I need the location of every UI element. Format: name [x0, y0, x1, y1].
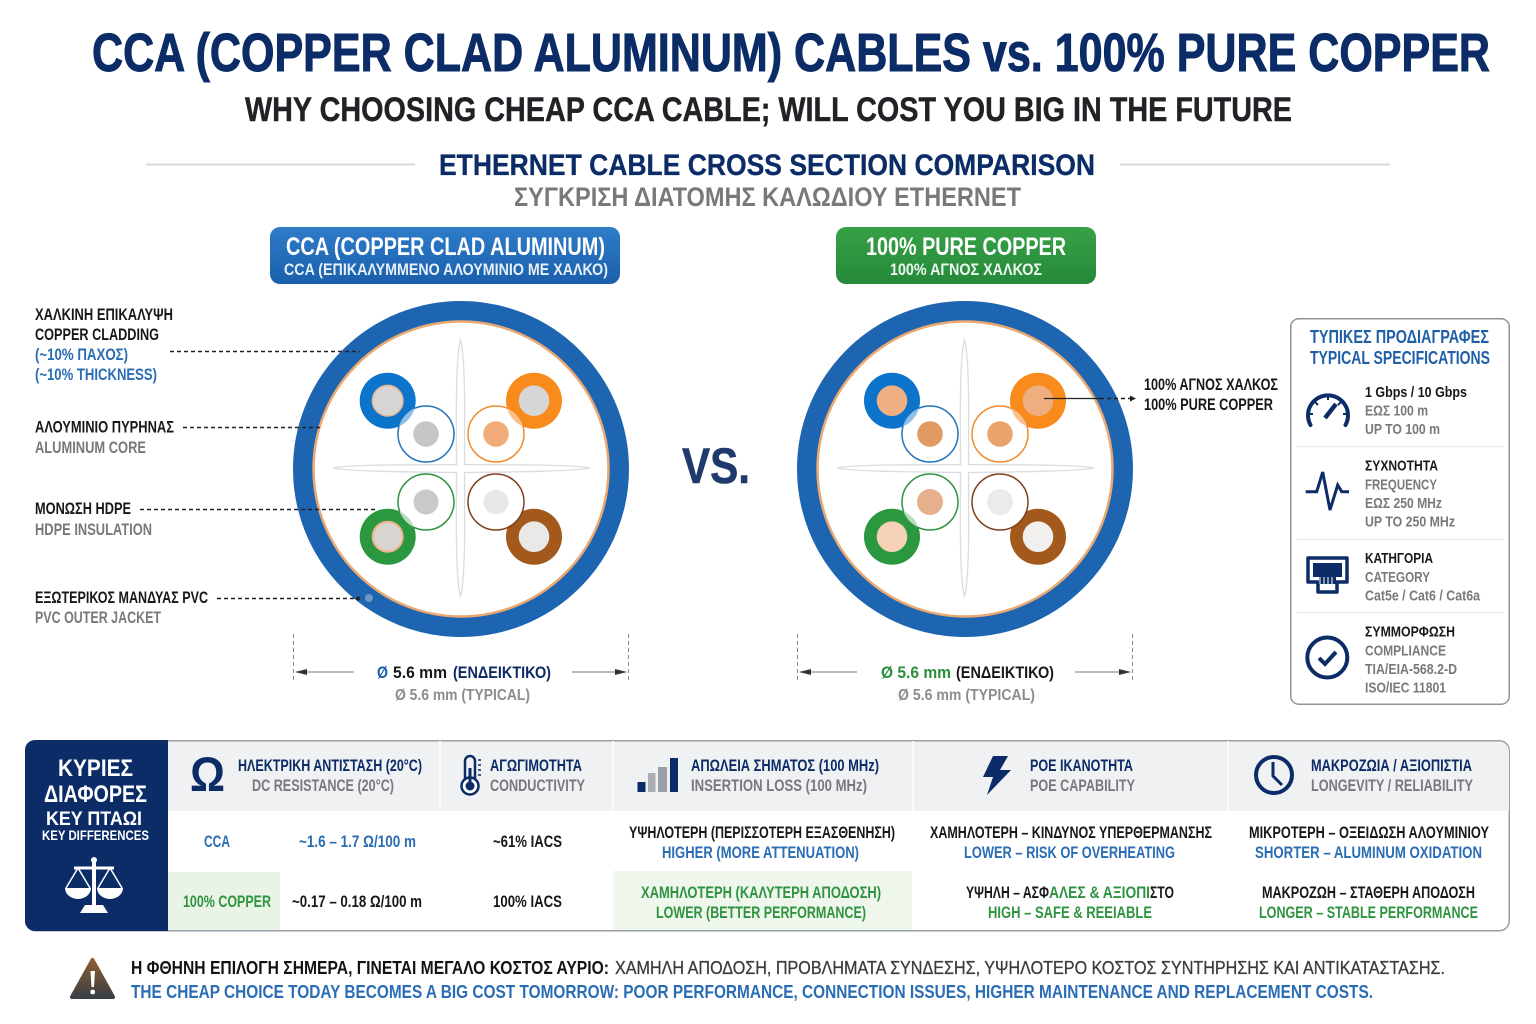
icon: ethernet port — [1308, 558, 1347, 592]
header: longevity: LONGEVITY / RELIABILITY — [1311, 777, 1473, 795]
row: 100% copper: 100% COPPER — [183, 893, 271, 911]
wire pair: brown — [468, 474, 562, 565]
icon: frequency pulse — [1306, 472, 1349, 510]
text: speed — [1365, 384, 1467, 438]
dimension: pure copper — [798, 634, 1132, 704]
row: CCA: LOWER – RISK OF OVERHEATING — [964, 844, 1175, 862]
icon: warning triangle — [72, 960, 113, 997]
cable cross section: CCA — [303, 311, 619, 627]
row: CCA: ΥΨΗΛΟΤΕΡΗ (ΠΕΡΙΣΣΟΤΕΡΗ ΕΞΑΣΘΕΝΗΣΗ) — [629, 824, 895, 842]
dimension: CCA: (ΕΝΔΕΙΚΤΙΚΟ) — [453, 663, 551, 682]
footer message: Η ΦΘΗΝΗ ΕΠΙΛΟΓΗ ΣΗΜΕΡΑ, ΓΙΝΕΤΑΙ ΜΕΓΑΛΟ ΚΟΣΤΟΣ ΑΥΡΙΟ: — [131, 958, 609, 978]
callout: HDPE insulation: HDPE INSULATION — [35, 521, 152, 539]
row: CCA: ~1.6 – 1.7 Ω/100 m — [299, 833, 416, 851]
dimension: CCA: Ø — [377, 663, 388, 682]
dimension: pure copper: Ø 5.6 mm — [881, 663, 951, 682]
callout: copper cladding: (~10% THICKNESS) — [35, 366, 157, 384]
callout: copper cladding: COPPER CLADDING — [35, 326, 159, 344]
row: 100% copper: ~0.17 – 0.18 Ω/100 m — [292, 893, 422, 911]
header: PoE capability: POE CAPABILITY — [1030, 777, 1135, 795]
section heading: ETHERNET CABLE CROSS SECTION COMPARISON — [439, 149, 1095, 182]
panel: key differences table — [25, 740, 1509, 931]
sidebar: key differences: ΔΙΑΦΟΡΕΣ — [44, 781, 147, 808]
row: CCA: ~61% IACS — [493, 833, 562, 851]
dimension: CCA: Ø 5.6 mm (TYPICAL) — [395, 687, 530, 704]
text: frequency: ΕΩΣ 250 MHz — [1365, 495, 1442, 512]
section heading: ΣΥΓΚΡΙΣΗ ΔΙΑΤΟΜΗΣ ΚΑΛΩΔΙΟΥ ETHERNET — [514, 182, 1021, 212]
callout: copper cladding — [35, 306, 360, 384]
footer message — [131, 958, 1445, 1002]
badge: CCA: CCA (COPPER CLAD ALUMINUM) — [286, 233, 605, 261]
subtitle: WHY CHOOSING CHEAP CCA CABLE; WILL COST YOU BIG IN THE FUTURE — [245, 91, 1292, 129]
sidebar: key differences — [25, 740, 168, 931]
dimension: pure copper: Ø 5.6 mm (TYPICAL) — [898, 687, 1035, 704]
wire pair: orange — [468, 373, 562, 462]
callout: PVC jacket: ΕΞΩΤΕΡΙΚΟΣ ΜΑΝΔΥΑΣ PVC — [35, 589, 208, 607]
dimension: CCA: 5.6 mm — [393, 663, 447, 682]
dimension: CCA — [294, 634, 628, 704]
wire pair: blue — [360, 373, 454, 462]
callout: copper cladding: (~10% ΠΑΧΟΣ) — [35, 346, 128, 364]
wire pair: orange — [972, 373, 1066, 462]
callout: aluminum core — [35, 418, 322, 457]
header: DC resistance — [190, 749, 422, 802]
header: conductivity: ΑΓΩΓΙΜΟΤΗΤΑ — [490, 757, 582, 775]
row: 100% copper: ΥΨΗΛΗ – ΑΣΦ — [966, 884, 1049, 902]
header: insertion loss: INSERTION LOSS (100 MHz) — [691, 777, 867, 795]
text: category: ΚΑΤΗΓΟΡΙΑ — [1365, 550, 1433, 567]
row: 100% copper: HIGH – SAFE & REEIABLE — [988, 904, 1152, 922]
wire pair: green — [864, 474, 958, 565]
sidebar: key differences: KEY DIFFERENCES — [42, 827, 149, 843]
row: 100% copper: LOWER (BETTER PERFORMANCE) — [656, 904, 866, 922]
text: frequency: FREQUENCY — [1365, 476, 1437, 494]
text: speed: ΕΩΣ 100 m — [1365, 402, 1428, 420]
header: longevity — [1256, 757, 1473, 795]
callout: PVC jacket: PVC OUTER JACKET — [35, 609, 161, 627]
callout: copper cladding: ΧΑΛΚΙΝΗ ΕΠΙΚΑΛΥΨΗ — [35, 306, 173, 324]
header: DC resistance: Ω — [190, 749, 225, 802]
sidebar: key differences: KEY ΠΤΑΩΙ — [46, 809, 142, 830]
dimension: pure copper: (ΕΝΔΕΙΚΤΙΚΟ) — [956, 663, 1054, 682]
row: CCA: ΧΑΜΗΛΟΤΕΡΗ – ΚΙΝΔΥΝΟΣ ΥΠΕΡΘΕΡΜΑΝΣΗΣ — [930, 824, 1212, 842]
header: conductivity — [462, 756, 585, 795]
footer message: ΧΑΜΗΛΗ ΑΠΟΔΟΣΗ, ΠΡΟΒΛΗΜΑΤΑ ΣΥΝΔΕΣΗΣ, ΥΨΗΛΟΤΕΡΟ ΚΟΣΤΟΣ ΣΥΝΤΗΡΗΣΗΣ ΚΑΙ ΑΝΤΙΚΑΤΑΣΤΑΣΗΣ. — [615, 958, 1445, 978]
callout: HDPE insulation — [35, 500, 376, 539]
icon: gauge — [1308, 395, 1348, 425]
header: insertion loss — [638, 757, 879, 795]
text: compliance: TIA/EIA-568.2-D — [1365, 661, 1457, 678]
icon: scales — [65, 857, 123, 913]
badge: CCA — [270, 227, 620, 284]
vs label: VS. — [682, 438, 750, 494]
text: compliance: ISO/IEC 11801 — [1365, 680, 1446, 696]
header: DC resistance: ΗΛΕΚΤΡΙΚΗ ΑΝΤΙΣΤΑΣΗ (20°C) — [238, 757, 422, 775]
header: PoE capability: ΡΟΕ ΙΚΑΝΟΤΗΤΑ — [1030, 757, 1133, 775]
badge: CCA: CCA (ΕΠΙΚΑΛΥΜΜΕΝΟ ΑΛΟΥΜΙΝΙΟ ΜΕ ΧΑΛΚΟ) — [284, 260, 608, 279]
specs heading — [1310, 327, 1490, 368]
header: PoE capability — [983, 756, 1135, 795]
specs heading: ΤΥΠΙΚΕΣ ΠΡΟΔΙΑΓΡΑΦΕΣ — [1310, 327, 1489, 347]
callout: HDPE insulation: ΜΟΝΩΣΗ HDPE — [35, 500, 131, 518]
header: insertion loss: ΑΠΩΛΕΙΑ ΣΗΜΑΤΟΣ (100 MHz) — [691, 757, 879, 775]
row: 100% copper: ΧΑΜΗΛΟΤΕΡΗ (ΚΑΛΥΤΕΡΗ ΑΠΟΔΟΣΗ) — [641, 884, 881, 902]
text: category: CATEGORY — [1365, 569, 1430, 586]
wire pair: brown — [972, 474, 1066, 565]
row: 100% copper: ΜΑΚΡΟΖΩΗ – ΣΤΑΘΕΡΗ ΑΠΟΔΟΣΗ — [1262, 884, 1475, 902]
row: CCA — [204, 824, 1489, 862]
sidebar: key differences: ΚΥΡΙΕΣ — [58, 755, 133, 782]
text: frequency: UP TO 250 MHz — [1365, 514, 1455, 530]
badge: pure copper — [836, 227, 1096, 284]
text: compliance: COMPLIANCE — [1365, 642, 1446, 660]
row: 100% copper: 100% IACS — [493, 893, 562, 911]
wire pair: blue — [864, 373, 958, 462]
header: conductivity: CONDUCTIVITY — [490, 777, 585, 795]
panel: typical specifications — [1291, 319, 1509, 704]
callout: aluminum core: ALUMINUM CORE — [35, 439, 146, 457]
text: compliance: ΣΥΜΜΟΡΦΩΣΗ — [1365, 624, 1455, 640]
row: CCA: CCA — [204, 833, 230, 851]
row: CCA: HIGHER (MORE ATTENUATION) — [662, 844, 859, 862]
badge: pure copper: 100% PURE COPPER — [866, 233, 1066, 261]
callout: pure copper: 100% ΑΓΝΟΣ ΧΑΛΚΟΣ — [1144, 376, 1278, 394]
text: speed: 1 Gbps / 10 Gbps — [1365, 384, 1467, 401]
text: frequency — [1365, 458, 1455, 530]
specs heading: TYPICAL SPECIFICATIONS — [1310, 348, 1490, 368]
callout: PVC jacket — [35, 589, 373, 627]
text: category: Cat5e / Cat6 / Cat6a — [1365, 588, 1481, 604]
badge: pure copper: 100% ΑΓΝΟΣ ΧΑΛΚΟΣ — [890, 260, 1042, 279]
text: speed: UP TO 100 m — [1365, 421, 1440, 438]
text: compliance — [1365, 624, 1457, 696]
cable cross section: pure copper — [807, 311, 1123, 627]
callout: pure copper — [1044, 376, 1278, 414]
row: 100% copper: ΣΤΟ — [1150, 884, 1174, 902]
callout: pure copper: 100% PURE COPPER — [1144, 396, 1273, 414]
header: DC resistance: DC RESISTANCE (20°C) — [252, 777, 394, 795]
header: longevity: ΜΑΚΡΟΖΩΙΑ / ΑΞΙΟΠΙΣΤΙΑ — [1311, 757, 1472, 775]
icon: compliance check — [1307, 638, 1347, 678]
text: category — [1365, 550, 1481, 604]
callout: aluminum core: ΑΛΟΥΜΙΝΙΟ ΠΥΡΗΝΑΣ — [35, 418, 174, 436]
row: 100% copper — [183, 884, 1478, 922]
row: 100% copper: ΑΛΕΣ & ΑΞΙΟΠΙ — [1049, 884, 1150, 902]
row: CCA: SHORTER – ALUMINUM OXIDATION — [1255, 844, 1482, 862]
wire pair: green — [360, 474, 454, 565]
section heading — [439, 149, 1095, 212]
text: frequency: ΣΥΧΝΟΤΗΤΑ — [1365, 458, 1438, 474]
